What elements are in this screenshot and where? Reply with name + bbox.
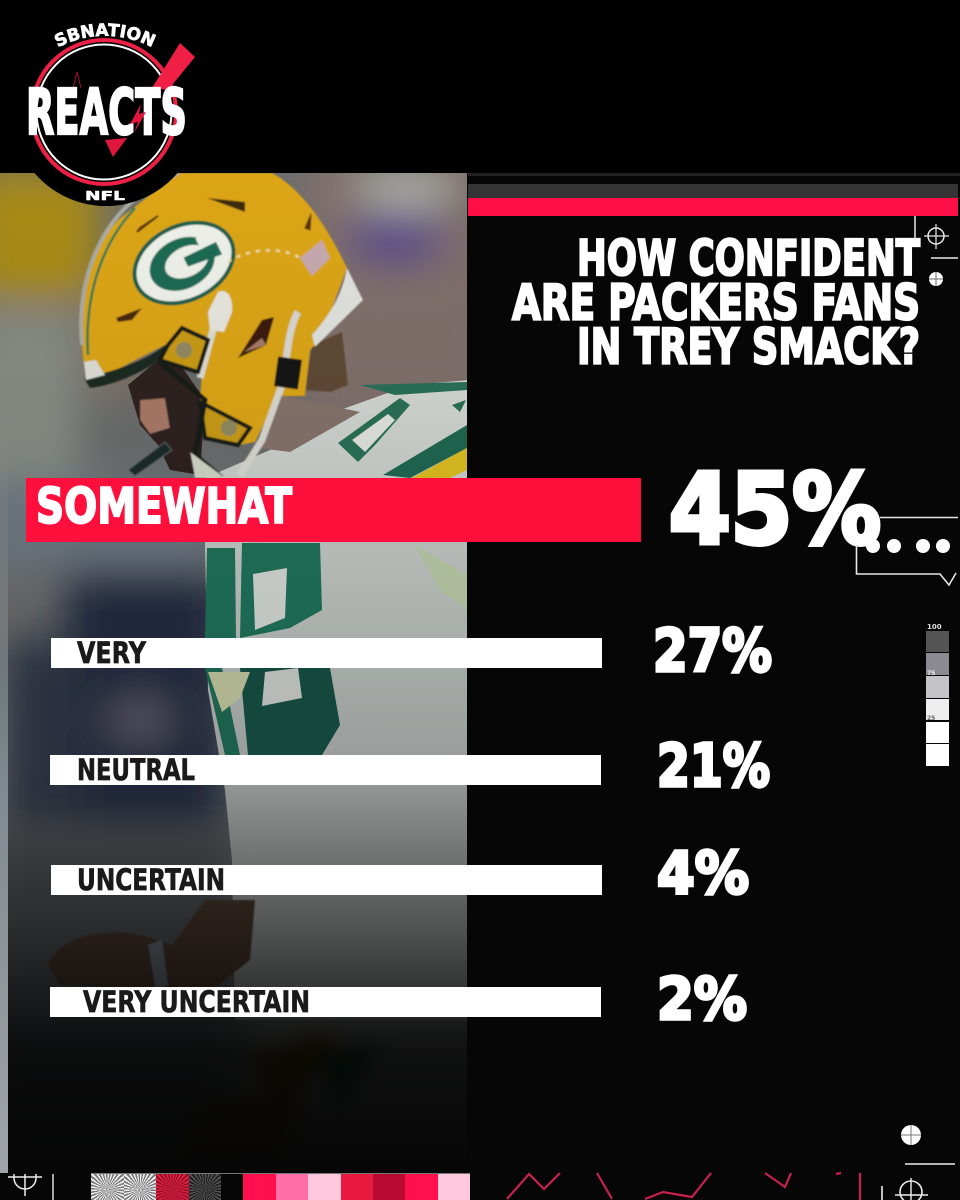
starburst swatch: red xyxy=(156,1174,189,1200)
bar: neutral 21% xyxy=(50,731,770,800)
grey scale legend: 75 xyxy=(927,670,935,677)
bar: somewhat 45%: SOMEWHAT xyxy=(36,478,292,535)
top black band xyxy=(0,0,960,173)
bar: neutral 21%: 21% xyxy=(657,731,770,800)
face xyxy=(128,361,203,474)
bar: neutral 21%: NEUTRAL xyxy=(77,753,195,787)
bar: somewhat 45%: 45% xyxy=(669,453,881,566)
bar: very uncertain 2%: 2% xyxy=(657,965,747,1033)
logo: SB Nation Reacts NFL: REACTS xyxy=(26,76,187,149)
starburst swatch: white xyxy=(91,1174,124,1200)
player photo panel xyxy=(0,150,490,1175)
speech bubble mark xyxy=(856,518,958,585)
bar: somewhat 45% xyxy=(26,453,881,566)
bar: uncertain 4%: 4% xyxy=(657,839,749,907)
red line chart fragments xyxy=(507,1173,860,1200)
chin straps and clips xyxy=(208,291,232,332)
bar: very 27% xyxy=(51,616,772,685)
bar: very 27%: VERY xyxy=(77,636,147,670)
arm and fist xyxy=(48,899,256,987)
left edge strip xyxy=(0,504,8,1173)
bar: very uncertain 2%: VERY UNCERTAIN xyxy=(83,985,310,1019)
logo: SB Nation Reacts NFL xyxy=(26,23,195,206)
helmet G logo xyxy=(132,220,236,306)
facemask xyxy=(84,345,172,388)
flag decal xyxy=(300,240,330,276)
crosshair marks top right xyxy=(915,216,958,286)
bar: uncertain 4%: UNCERTAIN xyxy=(77,863,225,897)
helmet xyxy=(80,173,363,478)
starburst swatch: white 2 xyxy=(124,1174,156,1200)
neck and hair xyxy=(258,395,360,452)
lower jersey shapes xyxy=(262,1035,364,1100)
starburst swatch: dark xyxy=(189,1174,221,1200)
top rules: grey and red xyxy=(468,173,960,216)
logo: SB Nation Reacts NFL: NFL xyxy=(85,189,126,203)
bar: uncertain 4% xyxy=(51,839,749,907)
jersey xyxy=(205,380,470,1020)
logo: SB Nation Reacts NFL: SBNATION xyxy=(54,23,156,47)
bar: very uncertain 2% xyxy=(50,965,747,1033)
grey scale legend: 100 xyxy=(927,623,942,631)
grey scale legend xyxy=(926,623,949,766)
grey scale legend: 25 xyxy=(927,715,935,722)
bottom colour swatches xyxy=(91,1173,470,1200)
bar: very 27%: 27% xyxy=(653,616,772,685)
bottom right crosshair marks xyxy=(882,1125,955,1200)
helmet ear hole xyxy=(238,317,274,358)
darkening overlay xyxy=(8,406,467,1173)
bottom left crosshair xyxy=(8,1174,53,1200)
title xyxy=(512,230,920,376)
